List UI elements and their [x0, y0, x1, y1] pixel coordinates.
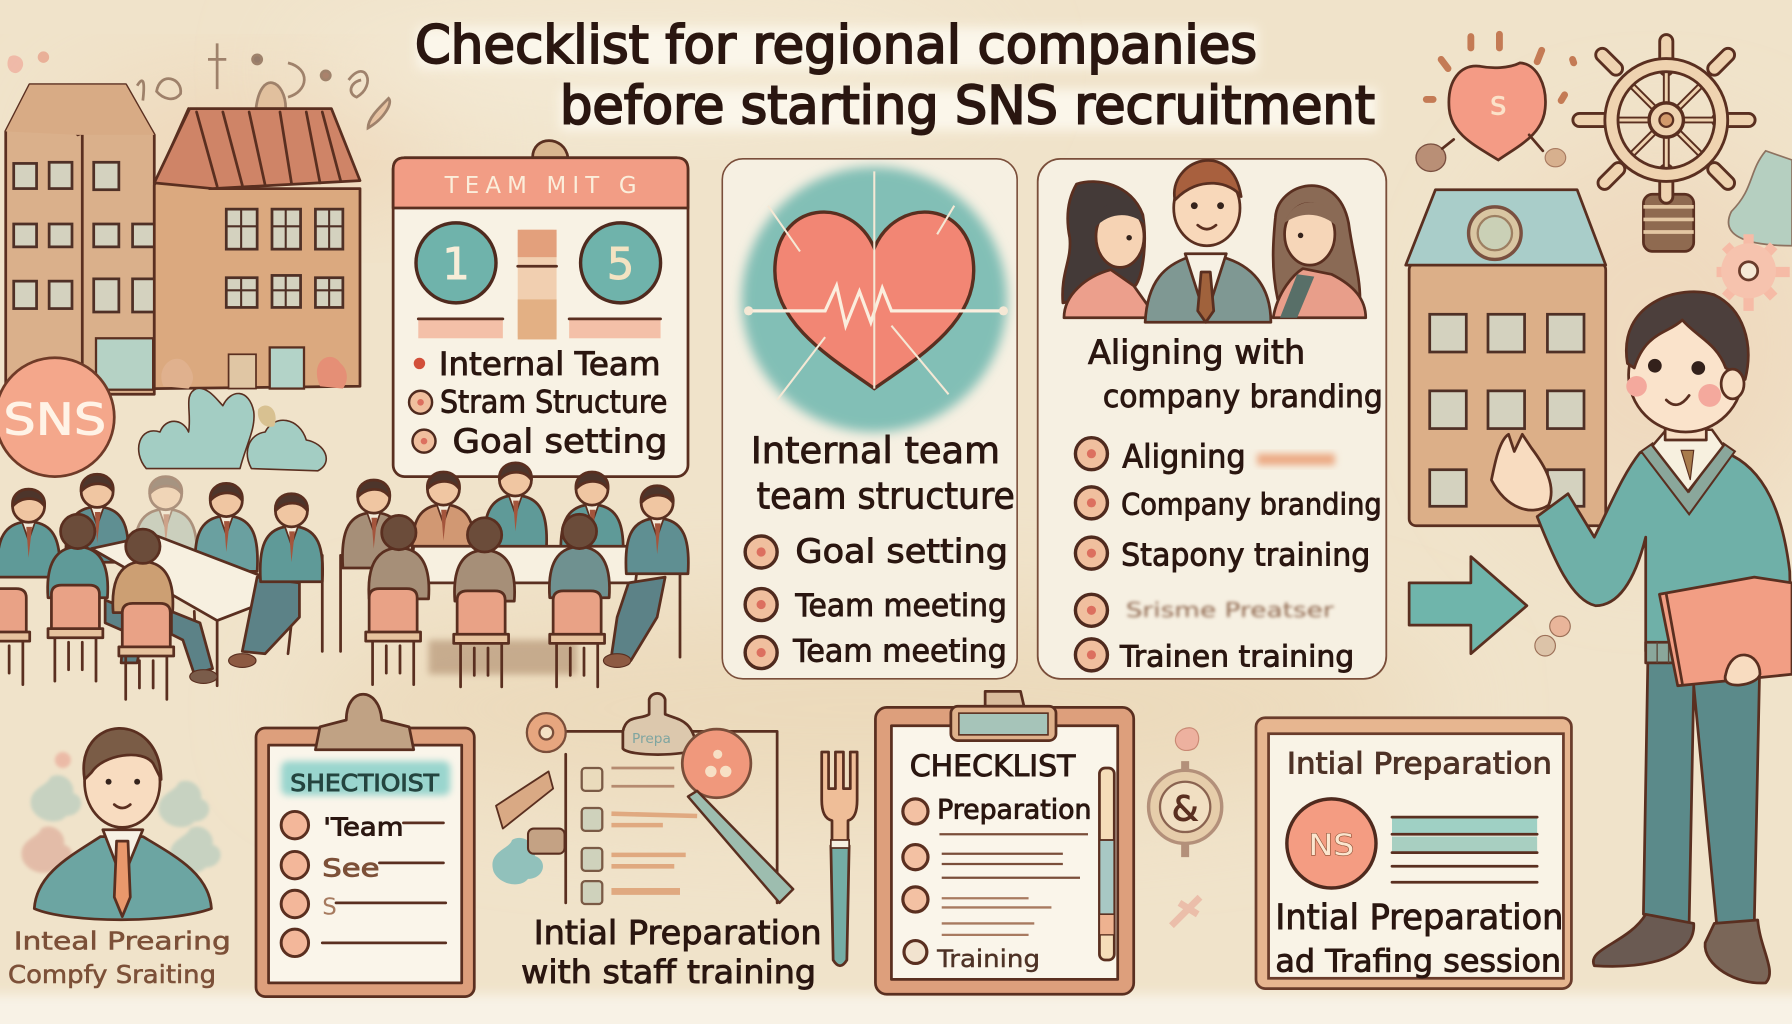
- panel body: [722, 159, 1017, 679]
- ribbed hem: [1646, 642, 1731, 663]
- seated person, back view two: [113, 529, 217, 699]
- icon: gear with ampersand: &: [1172, 790, 1199, 830]
- NS badge: [1287, 799, 1376, 888]
- highlighted heading: SHECTIOIST: [290, 771, 440, 797]
- heading: CHECKLIST: [910, 749, 1076, 784]
- head: [1626, 292, 1748, 440]
- caption: staff portrait: Inteal Prearing: [14, 927, 231, 956]
- caption: Intial Preparation: [1275, 898, 1563, 938]
- hand: [1491, 434, 1551, 510]
- building: back: [6, 85, 160, 394]
- list: See: [322, 854, 379, 883]
- legs: [1643, 651, 1760, 923]
- list: Preparation: [937, 795, 1091, 825]
- clipboard two: [875, 691, 1134, 994]
- caption: staff portrait: [8, 927, 231, 989]
- background blobs: [22, 752, 221, 873]
- sketched checklist: [492, 693, 822, 991]
- number five: [581, 223, 661, 303]
- bars: [418, 319, 661, 338]
- seated person, right side: [603, 486, 688, 667]
- sweater collar: [1641, 443, 1735, 514]
- SNS badge: SNS: [3, 395, 106, 445]
- caption: [1275, 898, 1563, 979]
- sweater: [1537, 453, 1792, 674]
- panel list: [1075, 437, 1382, 674]
- number one: 1: [442, 240, 470, 290]
- icon: fork: [822, 752, 857, 966]
- office building: [1406, 190, 1606, 526]
- arrow: [1409, 557, 1527, 654]
- caption: staff portrait: Compfy Sraiting: [8, 960, 216, 989]
- right woman: [1273, 186, 1366, 318]
- decorative doodles above buildings: [7, 43, 390, 128]
- card body: [393, 158, 688, 477]
- caption: [521, 913, 822, 991]
- caption: ad Trafing session: [1275, 943, 1561, 979]
- staff portrait: [22, 728, 221, 920]
- panel heading: company branding: [1103, 379, 1383, 415]
- checklist clip: [623, 693, 697, 755]
- icon: tree and gear at the edge: [1717, 151, 1792, 311]
- presenter: [1491, 292, 1792, 983]
- three colleagues: [1063, 160, 1366, 322]
- checklist clip: Prepa: [632, 731, 671, 747]
- seated person, back view one: [48, 514, 146, 681]
- list: S: [322, 894, 337, 920]
- icon: gear with ampersand: [1149, 728, 1222, 926]
- shoes: [1593, 914, 1694, 966]
- tie: [1681, 450, 1694, 480]
- panel list: Team meeting: [792, 634, 1007, 670]
- pin knob: [527, 713, 566, 752]
- panel: initial preparation: [1256, 718, 1571, 989]
- table top: [409, 546, 640, 583]
- middle column: [518, 230, 557, 339]
- checklist rows: [582, 768, 697, 904]
- clip: [315, 694, 414, 750]
- spokes: [1614, 69, 1719, 171]
- title: before starting SNS recruitment: [560, 75, 1375, 136]
- highlighted heading: [281, 761, 450, 797]
- card header: TEAM MIT G: [444, 173, 637, 199]
- clip: [951, 691, 1056, 741]
- book: [1659, 577, 1792, 686]
- building: front: [154, 109, 360, 389]
- heading: Intial Preparation: [1287, 747, 1552, 782]
- floor shadow: [429, 640, 577, 674]
- number five: 5: [607, 240, 634, 290]
- title: [415, 15, 1377, 136]
- list: Training: [936, 945, 1040, 973]
- panel heading: team structure: [757, 475, 1015, 518]
- left woman: [1063, 182, 1157, 318]
- heart icon: [744, 171, 1008, 400]
- card: team meeting: [393, 141, 688, 477]
- panel list: Trainen training: [1119, 639, 1354, 674]
- salmon seal: [682, 729, 751, 798]
- list: Stram Structure: [440, 385, 667, 421]
- teal glow: [742, 167, 1007, 432]
- panel: internal team: [722, 159, 1017, 679]
- panel list: Stapony training: [1121, 538, 1370, 574]
- caption: with staff training: [521, 953, 816, 991]
- pencil: [1099, 768, 1114, 960]
- number one: [416, 223, 496, 303]
- panel list: [745, 531, 1008, 670]
- panel heading: [751, 429, 1015, 518]
- handles: [1579, 41, 1749, 197]
- card header: [393, 158, 688, 208]
- panel heading: [1088, 332, 1383, 415]
- panel heading: Aligning with: [1088, 332, 1305, 371]
- panel list: Aligning: [1122, 437, 1246, 475]
- table top: [91, 535, 297, 621]
- list: 'Team: [323, 812, 403, 841]
- SNS badge: [0, 358, 114, 477]
- list: Goal setting: [453, 422, 667, 461]
- stacked lines: [1392, 817, 1537, 882]
- NS badge: NS: [1309, 828, 1354, 863]
- clipboard one: [256, 694, 474, 997]
- caption: Intial Preparation: [534, 913, 822, 952]
- pencil: [688, 791, 793, 903]
- panel list: Goal setting: [795, 531, 1008, 570]
- bushes: [139, 388, 326, 471]
- meeting: right table: [341, 463, 688, 687]
- centre man: [1145, 160, 1271, 322]
- icon: heart bulb: S: [1490, 91, 1506, 120]
- small blobs near arrow: [1535, 616, 1570, 656]
- meeting: left table: [0, 474, 323, 699]
- list: [903, 795, 1091, 973]
- list: Internal Team: [439, 345, 661, 383]
- panel list: Company branding: [1121, 487, 1382, 522]
- list: [409, 345, 667, 461]
- shirt collar: [1653, 430, 1723, 491]
- small tool icons: [492, 771, 565, 884]
- icon: heart bulb: [1416, 34, 1574, 171]
- panel: company branding: [1038, 159, 1386, 679]
- icon: ship wheel bulb: [1579, 41, 1749, 251]
- title: Checklist for regional companies: [415, 15, 1257, 76]
- seated person, right side: [229, 494, 323, 667]
- panel body: [1038, 159, 1386, 679]
- card tab: [533, 141, 568, 158]
- panel heading: Internal team: [751, 429, 1000, 472]
- panel list: Team meeting: [794, 588, 1007, 624]
- list: [281, 811, 446, 957]
- panel list: Srisme Preatser: [1126, 598, 1334, 622]
